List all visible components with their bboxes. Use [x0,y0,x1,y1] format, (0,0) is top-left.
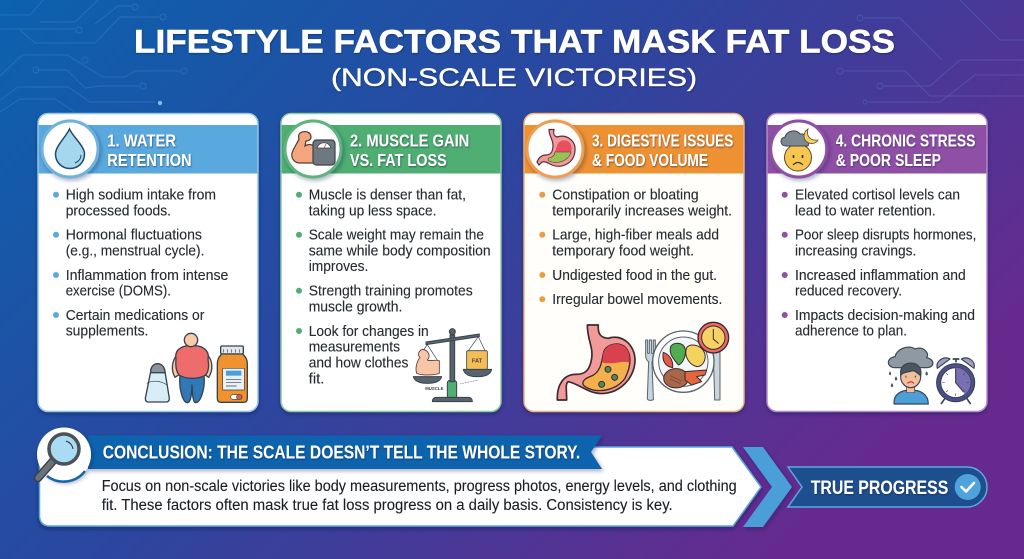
conclusion banner: CONCLUSION: THE SCALE DOESN’T TELL THE WHOLE STORY. [103,442,580,462]
icon: balance scale muscle vs fat [413,329,492,402]
bullet list: water retention: (e.g., menstrual cycle). [66,243,204,259]
heading: digestive issues: & FOOD VOLUME [592,150,708,170]
bullet list: muscle gain: taking up less space. [309,203,436,219]
bullet list: digestive issues: Large, high-fiber meals add [552,228,719,244]
bullet list: digestive issues [539,188,732,308]
bullet list: muscle gain: same while body composition [309,243,491,259]
bullet list: muscle gain: and how clothes [309,356,408,372]
panel: digestive issues and food volume [524,114,744,412]
heading: water retention [107,130,192,170]
bullet list: water retention: Hormonal fluctuations [66,228,202,244]
bullet list: water retention: High sodium intake from [66,188,216,204]
bullet list: muscle gain: Strength training promotes [309,284,473,300]
icon: magnifying glass [37,428,91,482]
bullet list: muscle gain: fit. [309,371,324,387]
heading: chronic stress [836,130,975,170]
conclusion body box: Focus on non-scale victories like body measurements, progress photos, energy levels, and clothing [102,478,737,495]
heading: chronic stress: 4. CHRONIC STRESS [836,130,975,150]
bullet list: water retention: supplements. [66,324,148,340]
icon: stomach [527,121,583,177]
icon: salt shaker, person, medication bottle [145,333,247,403]
bullet list: chronic stress: Increased inflammation and [795,268,966,284]
heading: water retention: RETENTION [107,150,192,170]
icon: check mark [955,474,981,500]
panel: water retention [38,114,258,412]
bullet list: muscle gain: Muscle is denser than fat, [309,188,466,204]
bullet list: chronic stress: reduced recovery. [795,284,902,300]
bullet list: water retention: processed foods. [66,203,171,219]
badge: true progress: TRUE PROGRESS [811,477,948,499]
bullet list: muscle gain: Scale weight may remain the [309,228,484,244]
panel: conclusion [37,428,761,526]
title [134,24,895,92]
bullet list: digestive issues: Undigested food in the gut. [552,268,717,284]
bullet list: water retention: Inflammation from intense [66,268,228,284]
heading: chronic stress: & POOR SLEEP [836,150,941,170]
panel: muscle gain vs fat loss [281,114,501,412]
icon: stomach with food [557,322,729,400]
bullet list: digestive issues: Irregular bowel movements. [552,292,722,308]
bullet list: muscle gain: improves. [309,259,368,275]
bullet list: muscle gain [296,188,491,387]
heading: muscle gain: 2. MUSCLE GAIN [350,130,469,150]
bullet list: chronic stress: lead to water retention. [795,203,936,219]
title: (NON-SCALE VICTORIES) [331,64,697,92]
bullet list: chronic stress [782,188,976,340]
heading: muscle gain [350,130,469,170]
icon: balance scale muscle vs fat: MUSCLE [425,386,444,391]
bullet list: digestive issues: temporarily increases weight. [552,203,732,219]
conclusion body box [40,447,761,526]
heading: water retention: 1. WATER [107,130,176,150]
heading: muscle gain: VS. FAT LOSS [350,150,447,170]
panel: chronic stress and poor sleep [767,114,987,412]
bullet list: water retention: Certain medications or [66,308,205,324]
heading: digestive issues [592,130,733,170]
bullet list: water retention: exercise (DOMS). [66,284,171,300]
icon: water drop [42,121,98,177]
bullet list: muscle gain: measurements [309,340,400,356]
badge: true progress [788,467,987,507]
icon: muscle arm and scale [285,121,341,177]
bullet list: muscle gain: muscle growth. [309,300,402,316]
bullet list: water retention [53,188,228,340]
heading: digestive issues: 3. DIGESTIVE ISSUES [592,130,733,150]
bullet list: chronic stress: increasing cravings. [795,243,916,259]
conclusion banner [88,436,602,469]
icon: cloud moon sad face [771,121,827,177]
conclusion body box: fit. These factors often mask true fat loss progress on a daily basis. Consistency is key. [102,497,673,514]
bullet list: muscle gain: Look for changes in [309,324,429,340]
title: LIFESTYLE FACTORS THAT MASK FAT LOSS [134,24,895,60]
bullet list: digestive issues: temporary food weight. [552,243,694,259]
bullet list: chronic stress: adherence to plan. [795,324,907,340]
arrow: chevron [743,447,792,527]
bullet list: digestive issues: Constipation or bloating [552,188,699,204]
bullet list: chronic stress: Poor sleep disrupts hormones, [795,228,976,244]
icon: balance scale muscle vs fat: FAT [472,358,483,364]
icon: stressed person under rain cloud and alarm clock [888,347,975,404]
bullet list: chronic stress: Elevated cortisol levels can [795,188,960,204]
bullet list: chronic stress: Impacts decision-making and [795,308,975,324]
